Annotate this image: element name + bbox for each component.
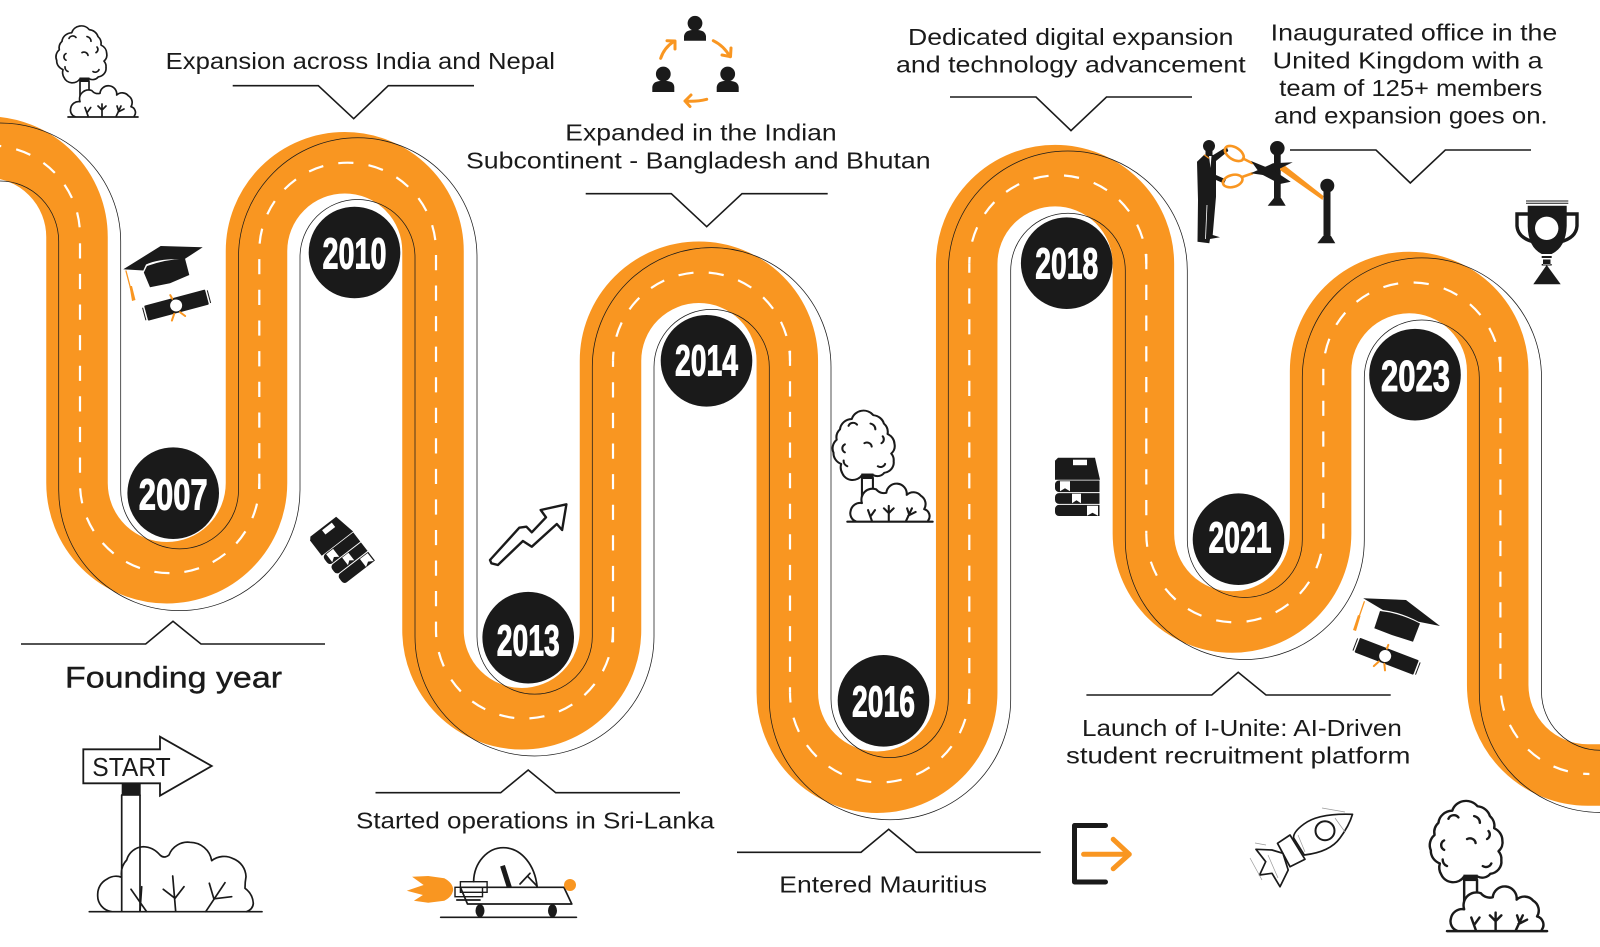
label: Subcontinent - Bangladesh and Bhutan bbox=[466, 147, 931, 173]
label: and expansion goes on. bbox=[1274, 103, 1548, 129]
icon: tree and bush, top left bbox=[56, 26, 138, 117]
label: student recruitment platform bbox=[1066, 742, 1410, 768]
icon: START signpost bbox=[83, 737, 262, 912]
label: Inaugurated office in the bbox=[1271, 20, 1557, 46]
pointer bbox=[233, 86, 474, 119]
pointer bbox=[376, 770, 680, 793]
icon: ribbon cutting bbox=[1197, 140, 1335, 243]
label: Founding year bbox=[65, 662, 282, 695]
year marker 2016 bbox=[838, 655, 929, 747]
pointer bbox=[1290, 150, 1531, 183]
milestone 2007: founding year bbox=[21, 621, 325, 695]
ribbon bbox=[1280, 163, 1324, 200]
icon: people cycle bbox=[652, 16, 739, 106]
label: Started operations in Sri-Lanka bbox=[356, 807, 715, 833]
year marker 2014 bbox=[661, 315, 752, 407]
road: winding orange timeline bbox=[0, 123, 1600, 820]
label: Launch of I-Unite: AI-Driven bbox=[1082, 715, 1402, 741]
year marker 2021: 2021 bbox=[1208, 513, 1272, 562]
icon: tree and bush, bottom right bbox=[1430, 801, 1547, 931]
year marker 2007 bbox=[127, 447, 219, 539]
label bbox=[896, 24, 1246, 78]
milestone 2018: digital expansion bbox=[896, 24, 1246, 131]
year marker 2016: 2016 bbox=[852, 678, 915, 727]
label: Expanded in the Indian bbox=[565, 120, 837, 146]
milestone 2023: United Kingdom office bbox=[1271, 20, 1557, 183]
year marker 2023 bbox=[1369, 329, 1461, 421]
icon: stacked books, upright bbox=[1055, 458, 1100, 516]
pointer bbox=[950, 97, 1192, 131]
road outline: first edge bbox=[0, 181, 1600, 820]
icon: car with rocket flame bbox=[407, 848, 576, 917]
road outline: second edge bbox=[0, 123, 1600, 758]
milestone 2016: Mauritius bbox=[737, 829, 1041, 897]
year marker 2010 bbox=[309, 207, 400, 298]
year marker 2023: 2023 bbox=[1381, 352, 1450, 401]
icon: graduation cap and diploma, right bbox=[1350, 598, 1440, 681]
pointer bbox=[586, 194, 828, 227]
road centre dashes bbox=[0, 146, 1589, 782]
icon: graduation cap and diploma, left bbox=[123, 246, 212, 327]
post left bbox=[1268, 141, 1286, 206]
year marker 2010: 2010 bbox=[322, 229, 386, 278]
pointer bbox=[1086, 672, 1391, 695]
year marker 2013: 2013 bbox=[497, 617, 560, 666]
year marker 2018 bbox=[1021, 217, 1112, 309]
milestone 2014: Bangladesh and Bhutan bbox=[466, 120, 931, 227]
year marker 2021 bbox=[1193, 493, 1284, 585]
label: and technology advancement bbox=[896, 52, 1246, 78]
icon: START signpost: START bbox=[92, 752, 171, 782]
label: Entered Mauritius bbox=[779, 871, 987, 897]
milestone 2013: Sri-Lanka bbox=[356, 770, 715, 833]
icon: exit arrow bbox=[1074, 826, 1129, 882]
icon: stacked books, tilted bbox=[308, 514, 375, 584]
pointer bbox=[737, 829, 1041, 852]
label: Expansion across India and Nepal bbox=[166, 48, 555, 74]
label: Dedicated digital expansion bbox=[908, 24, 1234, 50]
icon: rising arrow bbox=[490, 504, 566, 565]
year marker 2018: 2018 bbox=[1035, 239, 1098, 288]
label: United Kingdom with a bbox=[1273, 47, 1543, 73]
label bbox=[1271, 20, 1557, 129]
label bbox=[1066, 715, 1410, 768]
year marker 2007: 2007 bbox=[139, 470, 208, 519]
year marker 2014: 2014 bbox=[675, 336, 738, 385]
milestone 2021: I-Unite launch bbox=[1066, 672, 1410, 768]
icon: tree and bush, centre bbox=[833, 411, 933, 522]
pointer bbox=[21, 621, 325, 644]
label bbox=[466, 120, 931, 173]
road surface bbox=[0, 147, 1600, 782]
scissors bbox=[1221, 143, 1293, 189]
label: team of 125+ members bbox=[1279, 75, 1542, 101]
man bbox=[1197, 140, 1228, 243]
icon: trophy bbox=[1517, 201, 1577, 284]
milestone 2010: India and Nepal bbox=[166, 48, 555, 119]
year marker 2013 bbox=[482, 592, 574, 684]
post right bbox=[1317, 179, 1335, 243]
icon: rocket bbox=[1250, 808, 1352, 887]
